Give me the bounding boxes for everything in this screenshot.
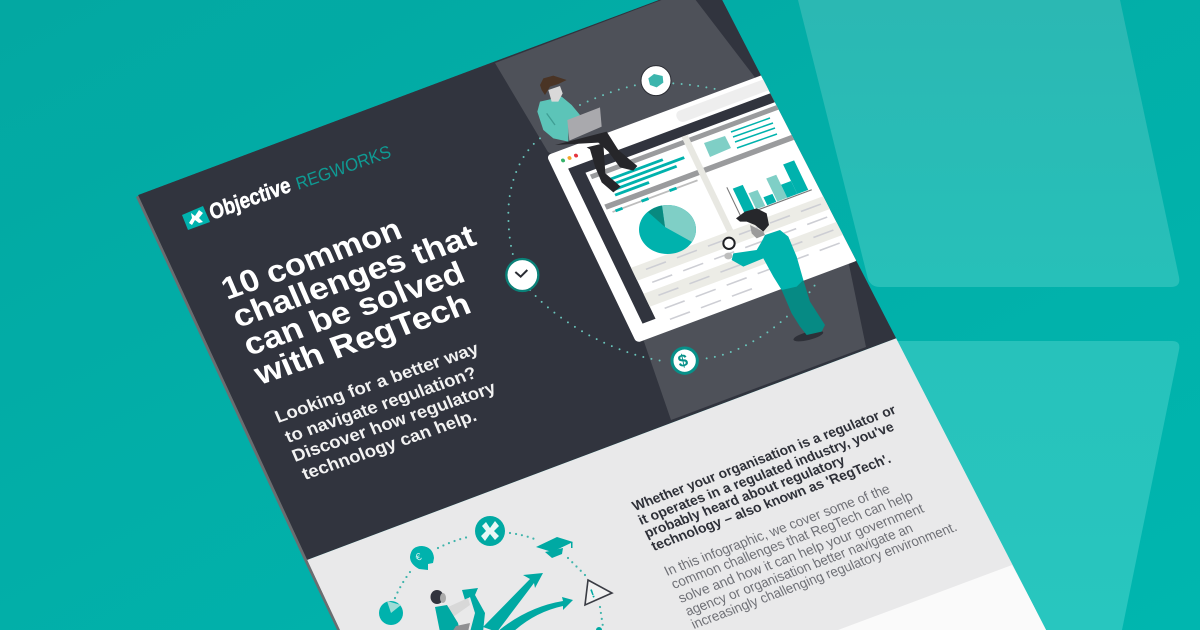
title: with RegTech (248, 286, 476, 392)
title: challenges that (227, 218, 481, 335)
subtitle: Looking for a better way (272, 338, 482, 427)
icon: logo badge (475, 516, 505, 546)
arrow: curved right (497, 597, 573, 630)
browser dashboard illustration (546, 73, 858, 343)
document page (136, 0, 1047, 630)
lower illustration: challenges ring (379, 516, 612, 630)
intro text: bold paragraph: it operates in a regulated industry, you've (636, 419, 897, 528)
intro text: regular paragraph: increasingly challenging regulatory environment. (689, 519, 959, 630)
dotted ring (395, 533, 603, 627)
panel separators (681, 135, 734, 235)
icon: warning triangle (585, 580, 612, 605)
panel: light intro section (307, 338, 1047, 630)
intro text: bold paragraph: Whether your organisation is a regulator or (630, 402, 899, 514)
square thumbnail and text lines (704, 118, 777, 157)
dotted orbit (508, 83, 818, 362)
title (222, 224, 478, 384)
person: pointing at arrows (430, 590, 470, 630)
orbit, people and icons artwork (506, 66, 825, 373)
table rows (631, 195, 854, 324)
panel: lighter top wedge (495, 0, 779, 154)
title: can be solved (238, 255, 470, 363)
panel: lighter lower wedge (640, 255, 866, 420)
logo: Objective RegWorks (182, 141, 393, 230)
intro text: regular paragraph: common challenges that RegTech can help (669, 488, 915, 592)
icon: head with euro: € (414, 551, 424, 564)
subtitle (274, 344, 494, 480)
small teal marker (596, 627, 602, 630)
intro text: regular paragraph: In this infographic, we cover some of the (662, 481, 892, 579)
arrows (462, 573, 573, 630)
browser window dots (560, 153, 579, 163)
pie chart (639, 205, 696, 254)
dark browser frame (568, 93, 775, 324)
bar chart (726, 159, 812, 216)
intro text: regular paragraph (662, 481, 959, 630)
background shape: upper translucent panel (798, 0, 1179, 287)
panel: dark cover (138, 0, 897, 560)
icon: dollar badge: $ (676, 350, 690, 371)
panel: white bottom strip (838, 565, 1047, 630)
pie legend line (612, 179, 698, 213)
left panel header bars (590, 140, 700, 210)
logo wordmark: Objective (206, 172, 293, 225)
subtitle: technology can help. (299, 405, 480, 484)
subtitle: to navigate regulation? (282, 362, 480, 447)
icon: 3d cube badge (641, 66, 671, 96)
teal text lines (610, 156, 685, 196)
person: sitting with laptop (537, 76, 637, 192)
icon: warning triangle: ! (588, 586, 597, 601)
logo product name: REGWORKS (293, 141, 393, 194)
search bar (676, 80, 769, 122)
intro text: regular paragraph: solve and how it can help your government (676, 501, 927, 606)
icon: clock badge (506, 259, 538, 291)
icon: head with euro (410, 546, 434, 570)
arrow: small upward (462, 588, 485, 630)
icon: graduation cap (536, 537, 573, 558)
icon: pie (379, 601, 403, 625)
background shape: lower translucent panel (880, 341, 1179, 630)
intro text: bold paragraph: probably heard about regulatory (642, 452, 848, 541)
person: with magnifying glass (723, 208, 825, 344)
icon: dollar badge (672, 348, 697, 373)
intro text: regular paragraph: agency or organisation better navigate an (683, 520, 915, 619)
subtitle: Discover how regulatory (289, 377, 499, 466)
intro text: bold paragraph: technology – also known as 'RegTech'. (649, 451, 893, 554)
arrow: long diagonal (483, 573, 543, 630)
logo mark (182, 206, 210, 230)
right panel header bars (689, 103, 798, 173)
title: 10 common (216, 211, 407, 307)
